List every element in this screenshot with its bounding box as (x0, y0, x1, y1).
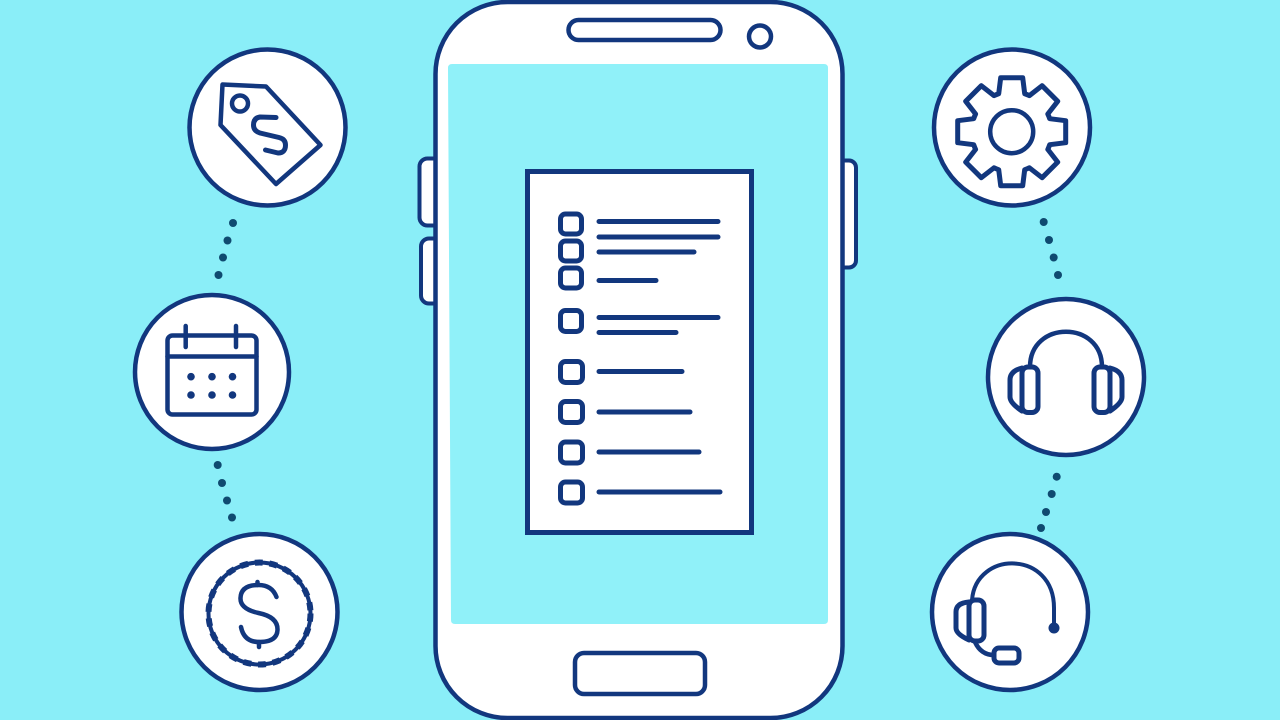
dotted connector: calendar to coin (214, 461, 236, 522)
icon: call-center headset (932, 534, 1088, 690)
icon: gear (934, 50, 1090, 206)
checklist document (528, 172, 752, 532)
phone speaker (568, 20, 720, 40)
document page (528, 172, 752, 532)
icon: dollar coin (182, 534, 338, 690)
checklist row 8 (560, 482, 720, 503)
dotted connector: price tag to calendar (214, 219, 237, 279)
phone camera (749, 26, 771, 48)
phone screen (448, 64, 828, 624)
smartphone (420, 2, 856, 718)
checklist row 1 (560, 214, 718, 237)
phone side button: upper left (420, 158, 450, 226)
checklist row 2 (560, 241, 694, 261)
checklist row 5 (560, 362, 682, 382)
checklist row 7 (560, 442, 699, 463)
icon: headphones (988, 299, 1144, 455)
dotted connector: headphones to headset (1037, 473, 1061, 532)
phone body (436, 2, 842, 718)
phone side button: lower left (421, 238, 451, 304)
icon: price tag (190, 50, 346, 206)
checklist row 4 (560, 310, 718, 332)
checklist row 6 (560, 402, 690, 422)
dotted connector: gear to headphones (1040, 218, 1062, 279)
phone side button: right (830, 160, 856, 268)
phone home button (575, 653, 705, 694)
checklist row 3 (560, 268, 656, 288)
icon: calendar (135, 295, 289, 449)
